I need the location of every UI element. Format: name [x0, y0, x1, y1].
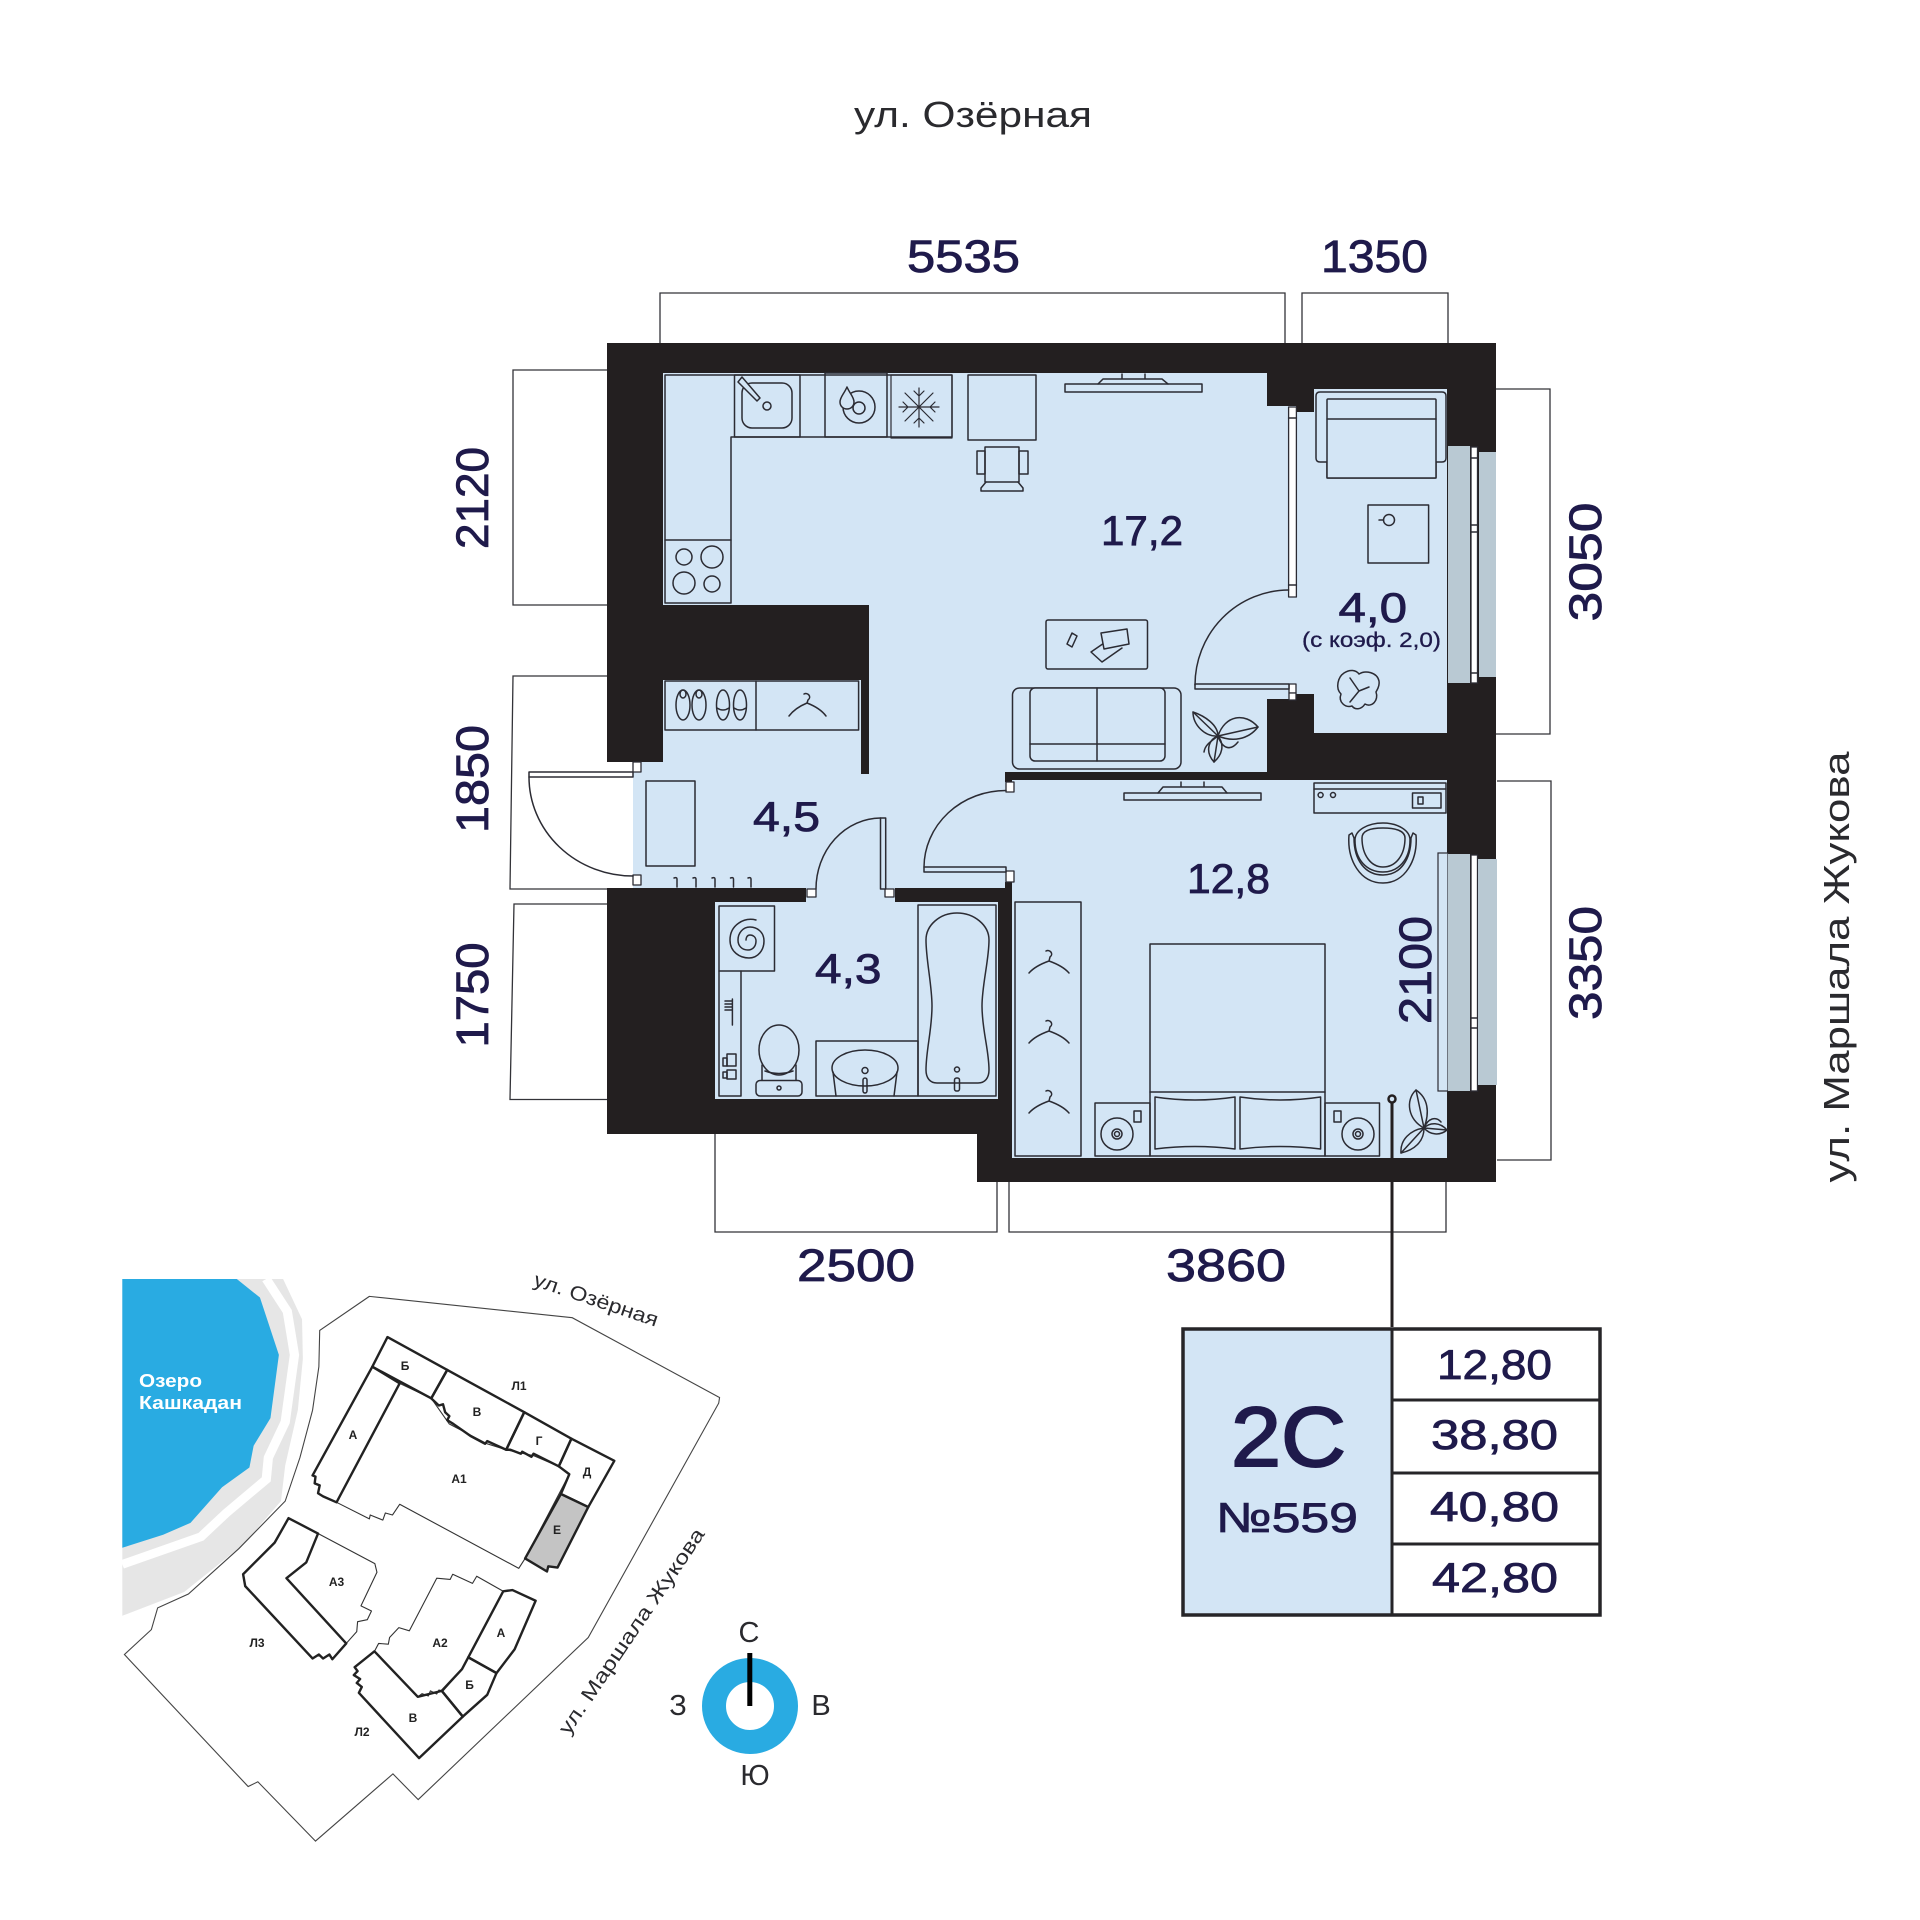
- building Л3: [243, 1518, 346, 1659]
- section labels: Е: [553, 1523, 561, 1537]
- section labels: [249, 1359, 592, 1739]
- chair: [977, 447, 1028, 491]
- window: loggia: [1448, 446, 1496, 683]
- entrance door: [529, 762, 641, 885]
- dimension numbers: 3860: [1166, 1240, 1286, 1291]
- room: bedroom: [1005, 780, 1447, 1158]
- type cell: [1184, 1329, 1391, 1615]
- compass: [669, 1617, 831, 1792]
- area label: bedroom: 12,8: [1187, 855, 1270, 902]
- lake: [122, 1279, 279, 1548]
- area label: living: 17,2: [1101, 507, 1183, 554]
- dimension numbers: 1350: [1321, 231, 1428, 282]
- lake label: Озеро: [139, 1371, 202, 1391]
- section labels: А: [349, 1428, 358, 1442]
- vanity shelf: [719, 971, 741, 1096]
- site plan: [122, 1269, 720, 1841]
- title: street right: ул. Маршала Жукова: [1816, 750, 1857, 1182]
- section labels: А3: [329, 1575, 344, 1589]
- rooms: living, loggia, hall, bathroom: [633, 373, 1447, 1099]
- plant bedroom: [1401, 1090, 1447, 1153]
- L2 section А: [468, 1590, 536, 1673]
- sofa: [1012, 688, 1181, 769]
- section labels: Л1: [511, 1379, 527, 1393]
- window: bedroom: [1438, 853, 1497, 1091]
- section Г: [506, 1412, 571, 1466]
- bed: [1150, 944, 1325, 1156]
- section labels: Г: [536, 1434, 543, 1448]
- section А: [313, 1367, 400, 1502]
- lake label: [139, 1371, 242, 1413]
- wash basin: [816, 1041, 918, 1096]
- loggia furniture: [1316, 392, 1446, 709]
- site shapes: [122, 1279, 720, 1841]
- bathtub: [918, 905, 996, 1096]
- kitchen: [665, 373, 1202, 603]
- area label: loggia: (с коэф. 2,0): [1302, 629, 1441, 652]
- section Е highlighted: [525, 1494, 588, 1571]
- dimension numbers: 5535: [907, 231, 1020, 282]
- A2 courtyard: [374, 1574, 503, 1697]
- full area: 42,80: [1432, 1554, 1558, 1601]
- section labels: Б: [465, 1678, 474, 1692]
- stove: [665, 540, 731, 594]
- L2 section Б: [442, 1657, 496, 1717]
- armchair: [1349, 823, 1416, 883]
- section Б: [372, 1337, 447, 1398]
- toilet: [756, 1025, 802, 1096]
- dimension numbers: 3350: [1560, 906, 1611, 1020]
- section labels: А2: [432, 1636, 448, 1650]
- bathroom door: [807, 818, 894, 897]
- side table: [1368, 505, 1429, 563]
- courtyard A1: [337, 1383, 569, 1568]
- compass: С: [739, 1617, 759, 1649]
- sink: [734, 375, 800, 437]
- area with loggia: 40,80: [1430, 1483, 1559, 1530]
- bathroom fixtures: [719, 905, 996, 1096]
- living area: 12,80: [1437, 1341, 1552, 1388]
- section labels: В: [409, 1711, 418, 1725]
- wardrobe: [1015, 902, 1081, 1156]
- section labels: Л2: [354, 1725, 370, 1739]
- tv bedroom: [1124, 782, 1261, 800]
- section labels: А1: [451, 1472, 467, 1486]
- section labels: Д: [583, 1465, 592, 1479]
- hall furniture: [646, 681, 859, 887]
- L2 section В: [354, 1651, 463, 1758]
- dining table: [968, 375, 1036, 440]
- apartment type: 2С: [1231, 1390, 1346, 1484]
- apartment number: №559: [1216, 1494, 1358, 1541]
- A3 courtyard: [286, 1534, 377, 1643]
- coffee table: [1046, 620, 1148, 669]
- boiler: [719, 906, 774, 971]
- section labels: В: [473, 1405, 482, 1419]
- area label: loggia: 4,0: [1338, 584, 1407, 631]
- dimension numbers: 2120: [447, 447, 498, 549]
- section В: [431, 1370, 524, 1450]
- dimension numbers: 3050: [1560, 502, 1611, 622]
- bedroom door: [924, 782, 1014, 882]
- compass: В: [811, 1690, 831, 1722]
- compass: З: [669, 1690, 687, 1722]
- tv living: [1065, 374, 1202, 392]
- nightstand left: [1095, 1103, 1150, 1156]
- section labels: А: [497, 1626, 506, 1640]
- plant living: [1193, 712, 1258, 762]
- dimension numbers: 2100: [1390, 916, 1441, 1024]
- hooks: [674, 878, 751, 887]
- street label on site plan: Жукова: ул. Маршала Жукова: [555, 1524, 710, 1739]
- bedroom furniture: [1015, 782, 1447, 1156]
- park band: [122, 1279, 303, 1616]
- area label: loggia: [1302, 584, 1441, 652]
- title: street top: ул. Озёрная: [854, 94, 1092, 135]
- dimension numbers: 1850: [447, 725, 498, 833]
- section labels: Б: [401, 1359, 410, 1373]
- street label on site plan: Озёрная: ул. Озёрная: [531, 1269, 661, 1331]
- area label: hall: 4,5: [753, 793, 820, 840]
- compass: Ю: [740, 1760, 770, 1792]
- nightstand right: [1325, 1103, 1380, 1156]
- pouf: [646, 781, 695, 866]
- total area: 38,80: [1431, 1411, 1558, 1458]
- site border: [124, 1296, 720, 1841]
- lounge sofa: [1316, 392, 1446, 478]
- living furniture: [1012, 620, 1258, 769]
- hanger hall: [789, 694, 826, 716]
- tree: [1338, 670, 1379, 709]
- washing machine: [825, 373, 887, 437]
- table: apartment summary: [1183, 1329, 1600, 1615]
- fridge: [891, 375, 952, 438]
- dimension brackets: [510, 293, 1551, 1232]
- dimension numbers: 1750: [447, 942, 498, 1048]
- section labels: Л3: [249, 1636, 265, 1650]
- dresser: [1314, 783, 1446, 813]
- section Д: [559, 1439, 614, 1507]
- loggia door: [1195, 407, 1296, 700]
- dimension numbers: 2500: [797, 1240, 915, 1291]
- lake label: Кашкадан: [139, 1393, 242, 1413]
- counter: [665, 375, 952, 603]
- walls: [607, 343, 1496, 1182]
- dimension numbers: [447, 231, 1611, 1291]
- doors: [529, 407, 1296, 897]
- shoe cabinet: [665, 681, 859, 730]
- area label: bathroom: 4,3: [815, 945, 882, 992]
- pointer line to table: [1388, 1096, 1396, 1327]
